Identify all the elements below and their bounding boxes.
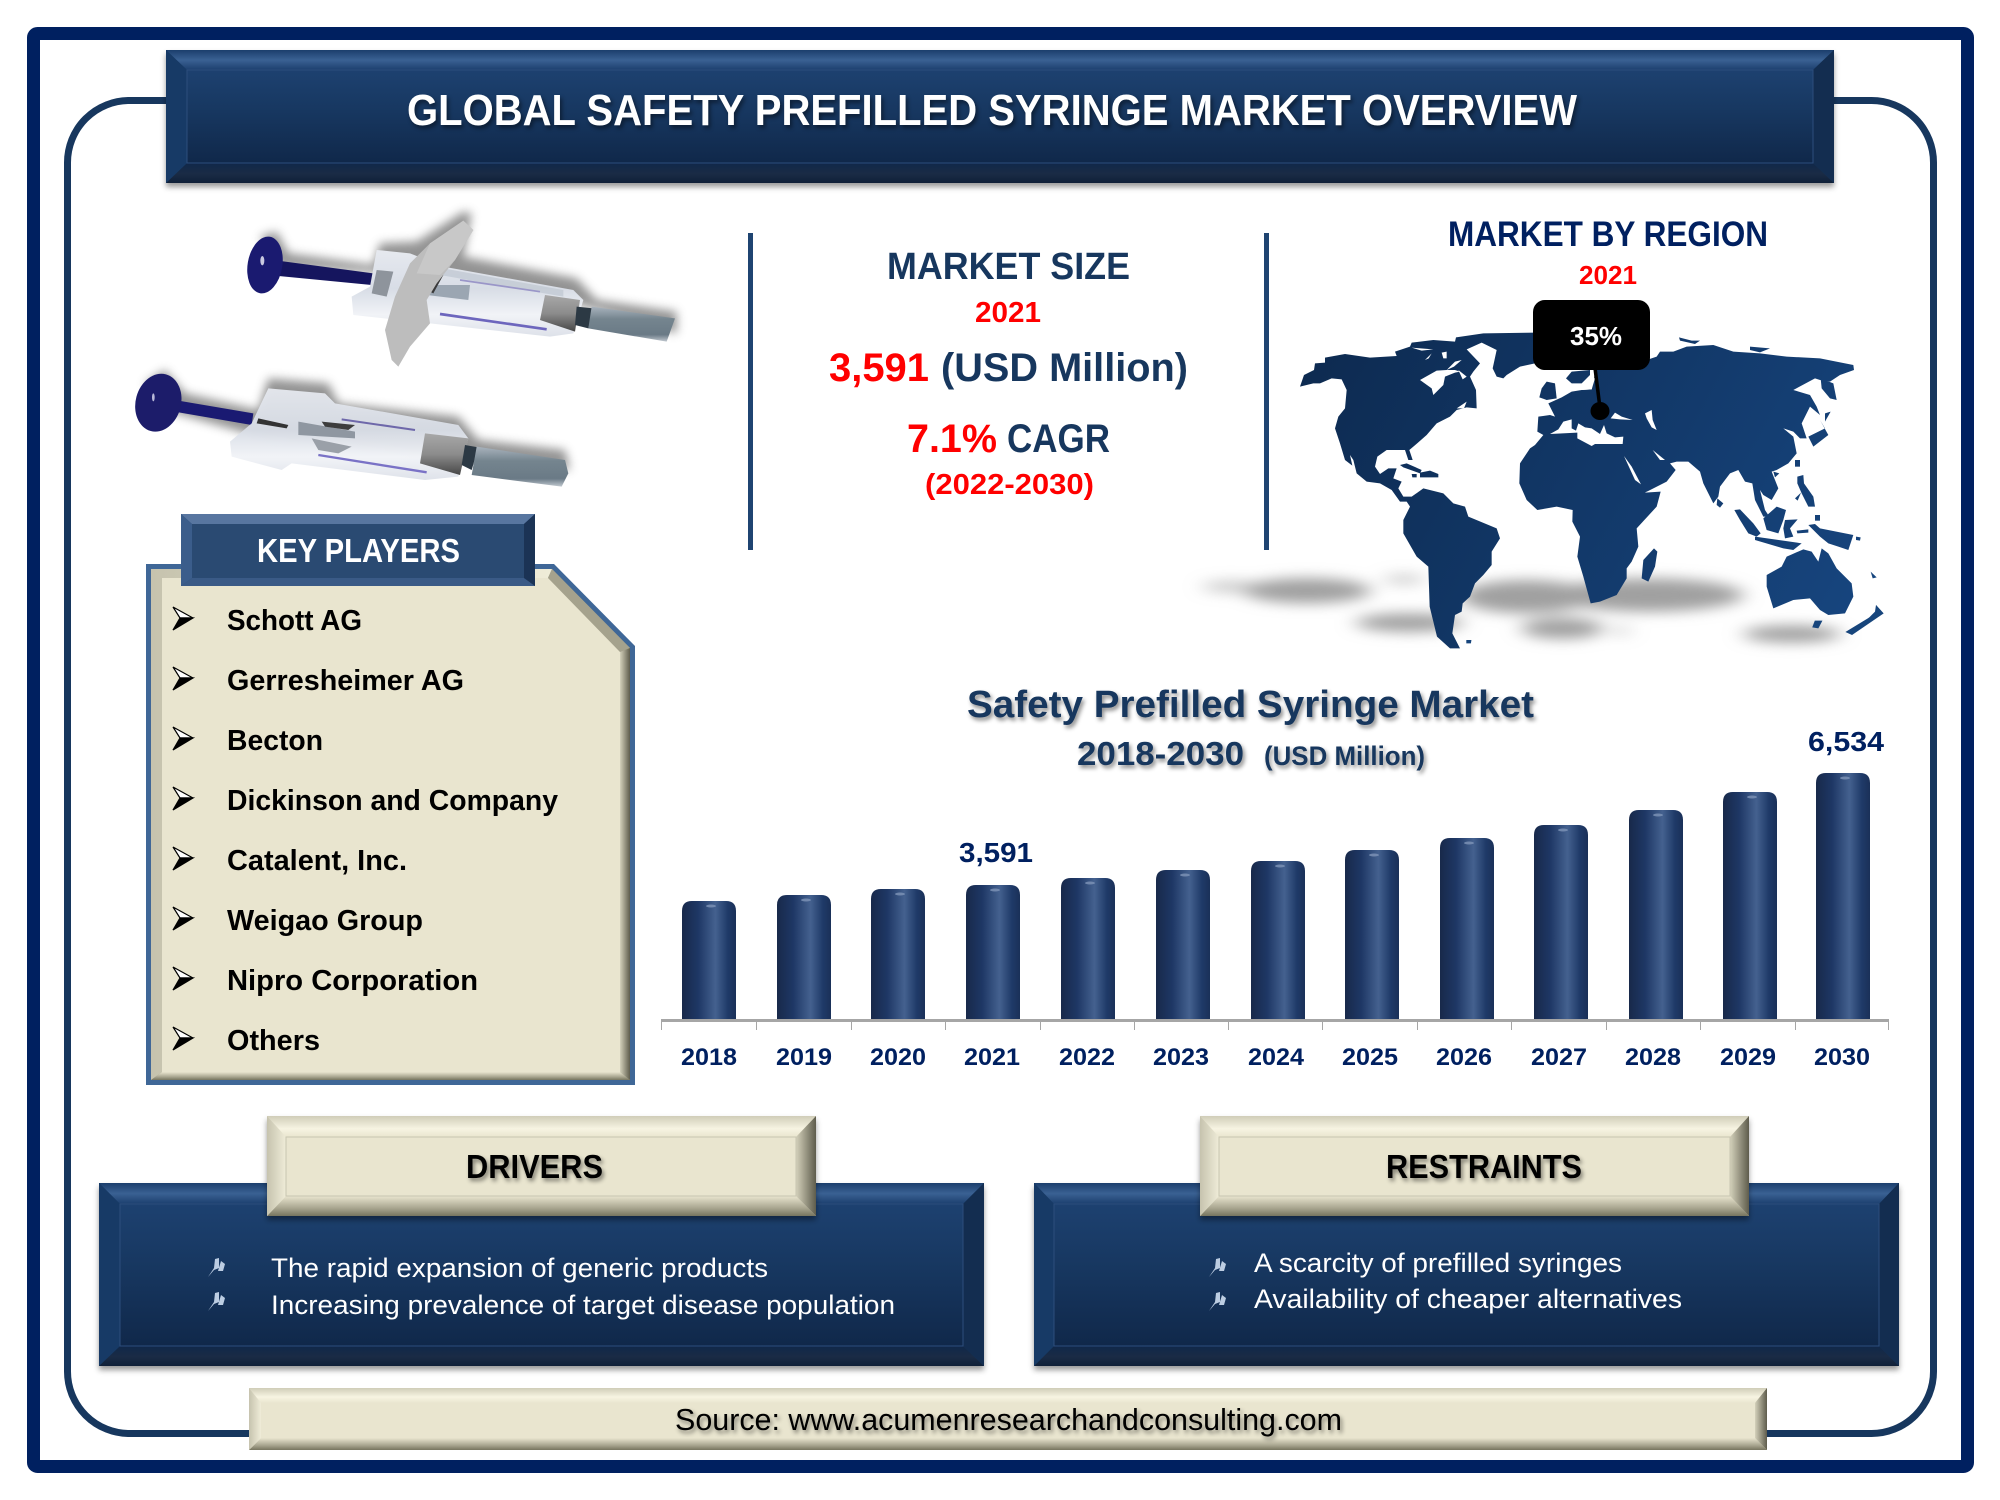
Americas and Greenland (1300, 320, 1535, 648)
CAGR value: 7.1% (907, 417, 997, 461)
drivers bullet icons (208, 1258, 225, 1311)
restraints text: Availability of cheaper alternatives (1254, 1284, 1682, 1314)
list: companies: Gerresheimer AG (227, 665, 464, 697)
panel: key players (146, 514, 635, 1085)
restraints bullet icons (1209, 1258, 1226, 1311)
year labels: 2028 (1625, 1044, 1681, 1071)
market size value (829, 346, 1188, 390)
chart title: Safety Prefilled Syringe Market (967, 684, 1534, 726)
CAGR period: (2022-2030) (925, 469, 1094, 501)
drivers text: The rapid expansion of generic products (271, 1253, 768, 1283)
Eurasia, Africa and Oceania (1519, 337, 1883, 620)
Eurasia water cutouts (1550, 375, 1665, 492)
market size value: (USD Million) (941, 346, 1188, 390)
divider left (748, 233, 753, 550)
bar chart (661, 726, 1889, 1071)
bar top highlights (706, 776, 1850, 908)
syringe image: lower (129, 368, 570, 487)
list: companies: Schott AG (227, 605, 362, 637)
Americas water cutouts (1412, 348, 1467, 408)
map shadow (1203, 574, 1840, 643)
CAGR value: CAGR (1007, 417, 1110, 461)
year labels: 2024 (1248, 1044, 1305, 1071)
restraints text: A scarcity of prefilled syringes (1254, 1248, 1622, 1278)
year labels: 2027 (1531, 1044, 1587, 1071)
year labels: 2019 (776, 1044, 832, 1071)
year labels: 2030 (1814, 1044, 1870, 1071)
year labels: 2025 (1342, 1044, 1398, 1071)
restraints text (1254, 1248, 1682, 1314)
market size block (829, 246, 1188, 501)
market size heading: MARKET SIZE (887, 246, 1130, 288)
year labels: 2026 (1436, 1044, 1492, 1071)
year labels: 2022 (1059, 1044, 1115, 1071)
list: companies: Nipro Corporation (227, 965, 478, 997)
restraints tab: RESTRAINTS (1386, 1148, 1582, 1185)
callout: Europe 35% (1533, 300, 1650, 420)
list: companies: Dickinson and Company (227, 785, 558, 817)
drivers tab (267, 1116, 816, 1216)
CAGR value (907, 417, 1110, 461)
market size value: 3,591 (829, 346, 929, 390)
panel: drivers (99, 1116, 984, 1366)
key players tab: KEY PLAYERS (257, 532, 460, 569)
chart title: 2018-2030 (1077, 735, 1244, 772)
drivers tab: DRIVERS (466, 1148, 603, 1185)
value labels: 3,591 (959, 837, 1033, 868)
title banner (166, 50, 1834, 183)
source bar (249, 1388, 1767, 1450)
year labels: 2029 (1720, 1044, 1776, 1071)
year labels: 2018 (681, 1044, 737, 1071)
year labels: 2023 (1153, 1044, 1209, 1071)
list arrow bullets (173, 607, 193, 1050)
chart title: (USD Million) (1264, 741, 1425, 771)
market by region heading: MARKET BY REGION (1448, 215, 1768, 254)
list: companies: Others (227, 1025, 320, 1057)
list: companies: Becton (227, 725, 323, 757)
list: companies (227, 605, 558, 1057)
restraints tab (1200, 1116, 1749, 1216)
chart title (967, 684, 1534, 772)
world map (1203, 320, 1884, 648)
source bar: Source: www.acumenresearchandconsulting.com (675, 1402, 1342, 1437)
drivers text: Increasing prevalence of target disease population (271, 1290, 895, 1320)
key players tab (181, 514, 535, 586)
market size year: 2021 (975, 297, 1041, 329)
title text: GLOBAL SAFETY PREFILLED SYRINGE MARKET OVERVIEW (407, 86, 1577, 135)
divider right (1264, 233, 1269, 550)
value labels (959, 726, 1884, 868)
bars (682, 773, 1870, 1019)
value labels: 6,534 (1808, 726, 1884, 757)
market by region year: 2021 (1579, 260, 1637, 290)
list: companies: Catalent, Inc. (227, 845, 407, 877)
year labels (681, 1044, 1870, 1071)
year labels: 2021 (964, 1044, 1020, 1071)
drivers text (271, 1253, 895, 1320)
callout: Europe 35%: 35% (1570, 321, 1622, 351)
panel: restraints (1034, 1116, 1899, 1366)
lower Oceania and South America tips (1466, 605, 1884, 643)
axis (661, 1019, 1889, 1030)
year labels: 2020 (870, 1044, 926, 1071)
syringe image: upper (243, 212, 677, 367)
list: companies: Weigao Group (227, 905, 423, 937)
